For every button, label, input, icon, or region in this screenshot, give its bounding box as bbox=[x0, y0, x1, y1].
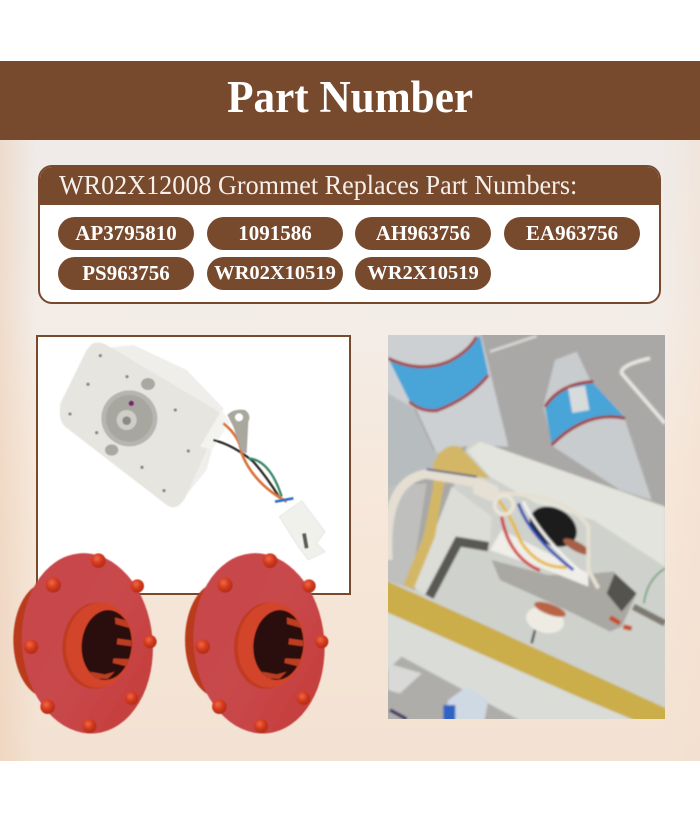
bottle left bbox=[380, 330, 508, 453]
panel: motor product photo bbox=[37, 336, 350, 594]
part number pill: WR2X10519 bbox=[367, 262, 479, 284]
part number pill bbox=[355, 257, 491, 290]
part number pill: PS963756 bbox=[82, 261, 170, 285]
part number pill: WR02X10519 bbox=[214, 262, 336, 284]
part number pill bbox=[207, 217, 343, 250]
title banner bbox=[0, 61, 700, 140]
wires bbox=[502, 517, 540, 571]
bottle right bbox=[543, 352, 652, 500]
part number pill bbox=[207, 257, 343, 290]
part number pill: AH963756 bbox=[376, 221, 470, 245]
lower housing bbox=[388, 614, 630, 719]
part number pill: EA963756 bbox=[526, 221, 618, 245]
photo: installed motor in freezer bbox=[380, 330, 673, 727]
part number pill bbox=[504, 217, 640, 250]
left mottled floor bbox=[388, 483, 427, 586]
yellow strip bbox=[388, 580, 665, 719]
panel heading: WR02X12008 Grommet Replaces Part Numbers: bbox=[59, 170, 577, 200]
part number pill bbox=[355, 217, 491, 250]
lower window bbox=[388, 656, 519, 719]
part number pill: AP3795810 bbox=[75, 221, 177, 245]
far left bottle bbox=[388, 393, 439, 486]
white housing bbox=[394, 444, 665, 710]
title banner: Part Number bbox=[227, 72, 473, 122]
motor bbox=[492, 560, 637, 632]
icon: fan motor with wiring bbox=[59, 343, 325, 560]
part number pill: 1091586 bbox=[238, 221, 312, 245]
grey bracket bbox=[429, 542, 488, 597]
panel heading bbox=[38, 165, 661, 205]
part number pill bbox=[58, 257, 194, 290]
grommet bbox=[526, 607, 564, 634]
part number pill bbox=[58, 217, 194, 250]
icon: left red grommet bbox=[13, 548, 160, 739]
panel: replaced part numbers bbox=[38, 165, 661, 304]
icon: right red grommet bbox=[185, 548, 332, 739]
yellow edge bbox=[403, 446, 490, 589]
